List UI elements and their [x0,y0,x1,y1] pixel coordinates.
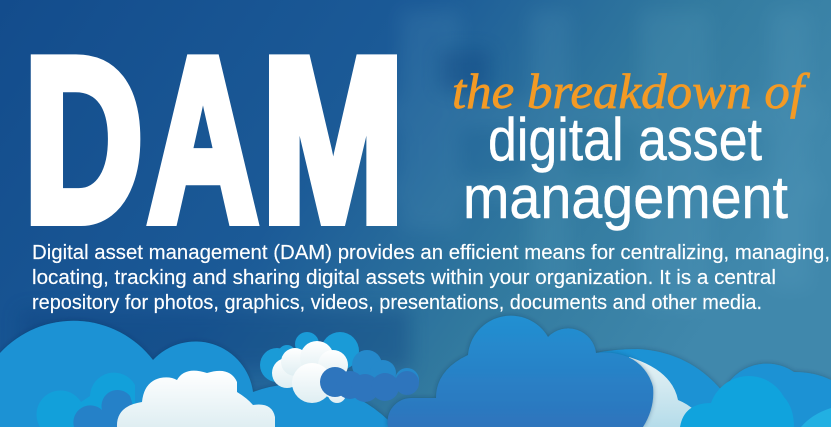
cloud: pale teal corner [801,408,831,427]
heading: digital asset management: management [463,164,788,231]
clouds: right bank [387,316,831,427]
cloud: small teal [36,373,135,427]
icon: crescent moon [629,357,706,427]
cloud: back blue [260,332,359,382]
heading: digital asset management: digital asset [488,106,762,173]
cloud: white foreground [117,371,275,427]
body text: repository for photos, graphics, videos, presentations, documents and other media. [32,291,762,314]
cloud: white middle [272,341,349,403]
subtitle: the breakdown of: the breakdown of [452,63,810,119]
body text: locating, tracking and sharing digital assets within your organization. It is a central [32,266,776,289]
clouds: left bank [0,321,392,427]
heading: DAM: A [148,11,258,270]
cloud: large blue [387,316,653,427]
heading: DAM: D [24,11,143,270]
cloud: blue top right [352,350,419,392]
cloud: rear large arc [590,349,831,427]
cloud: large back [0,321,392,427]
cloud: small blue [73,390,140,427]
heading: digital asset management [463,106,788,231]
cloud: blue front [320,367,419,402]
heading: DAM [24,11,404,270]
body text [32,241,830,314]
heading: DAM: M [262,11,404,270]
cloud: teal small [680,376,794,427]
body text: Digital asset management (DAM) provides an efficient means for centralizing, managing, [32,241,830,264]
clouds: centre group [260,332,419,403]
